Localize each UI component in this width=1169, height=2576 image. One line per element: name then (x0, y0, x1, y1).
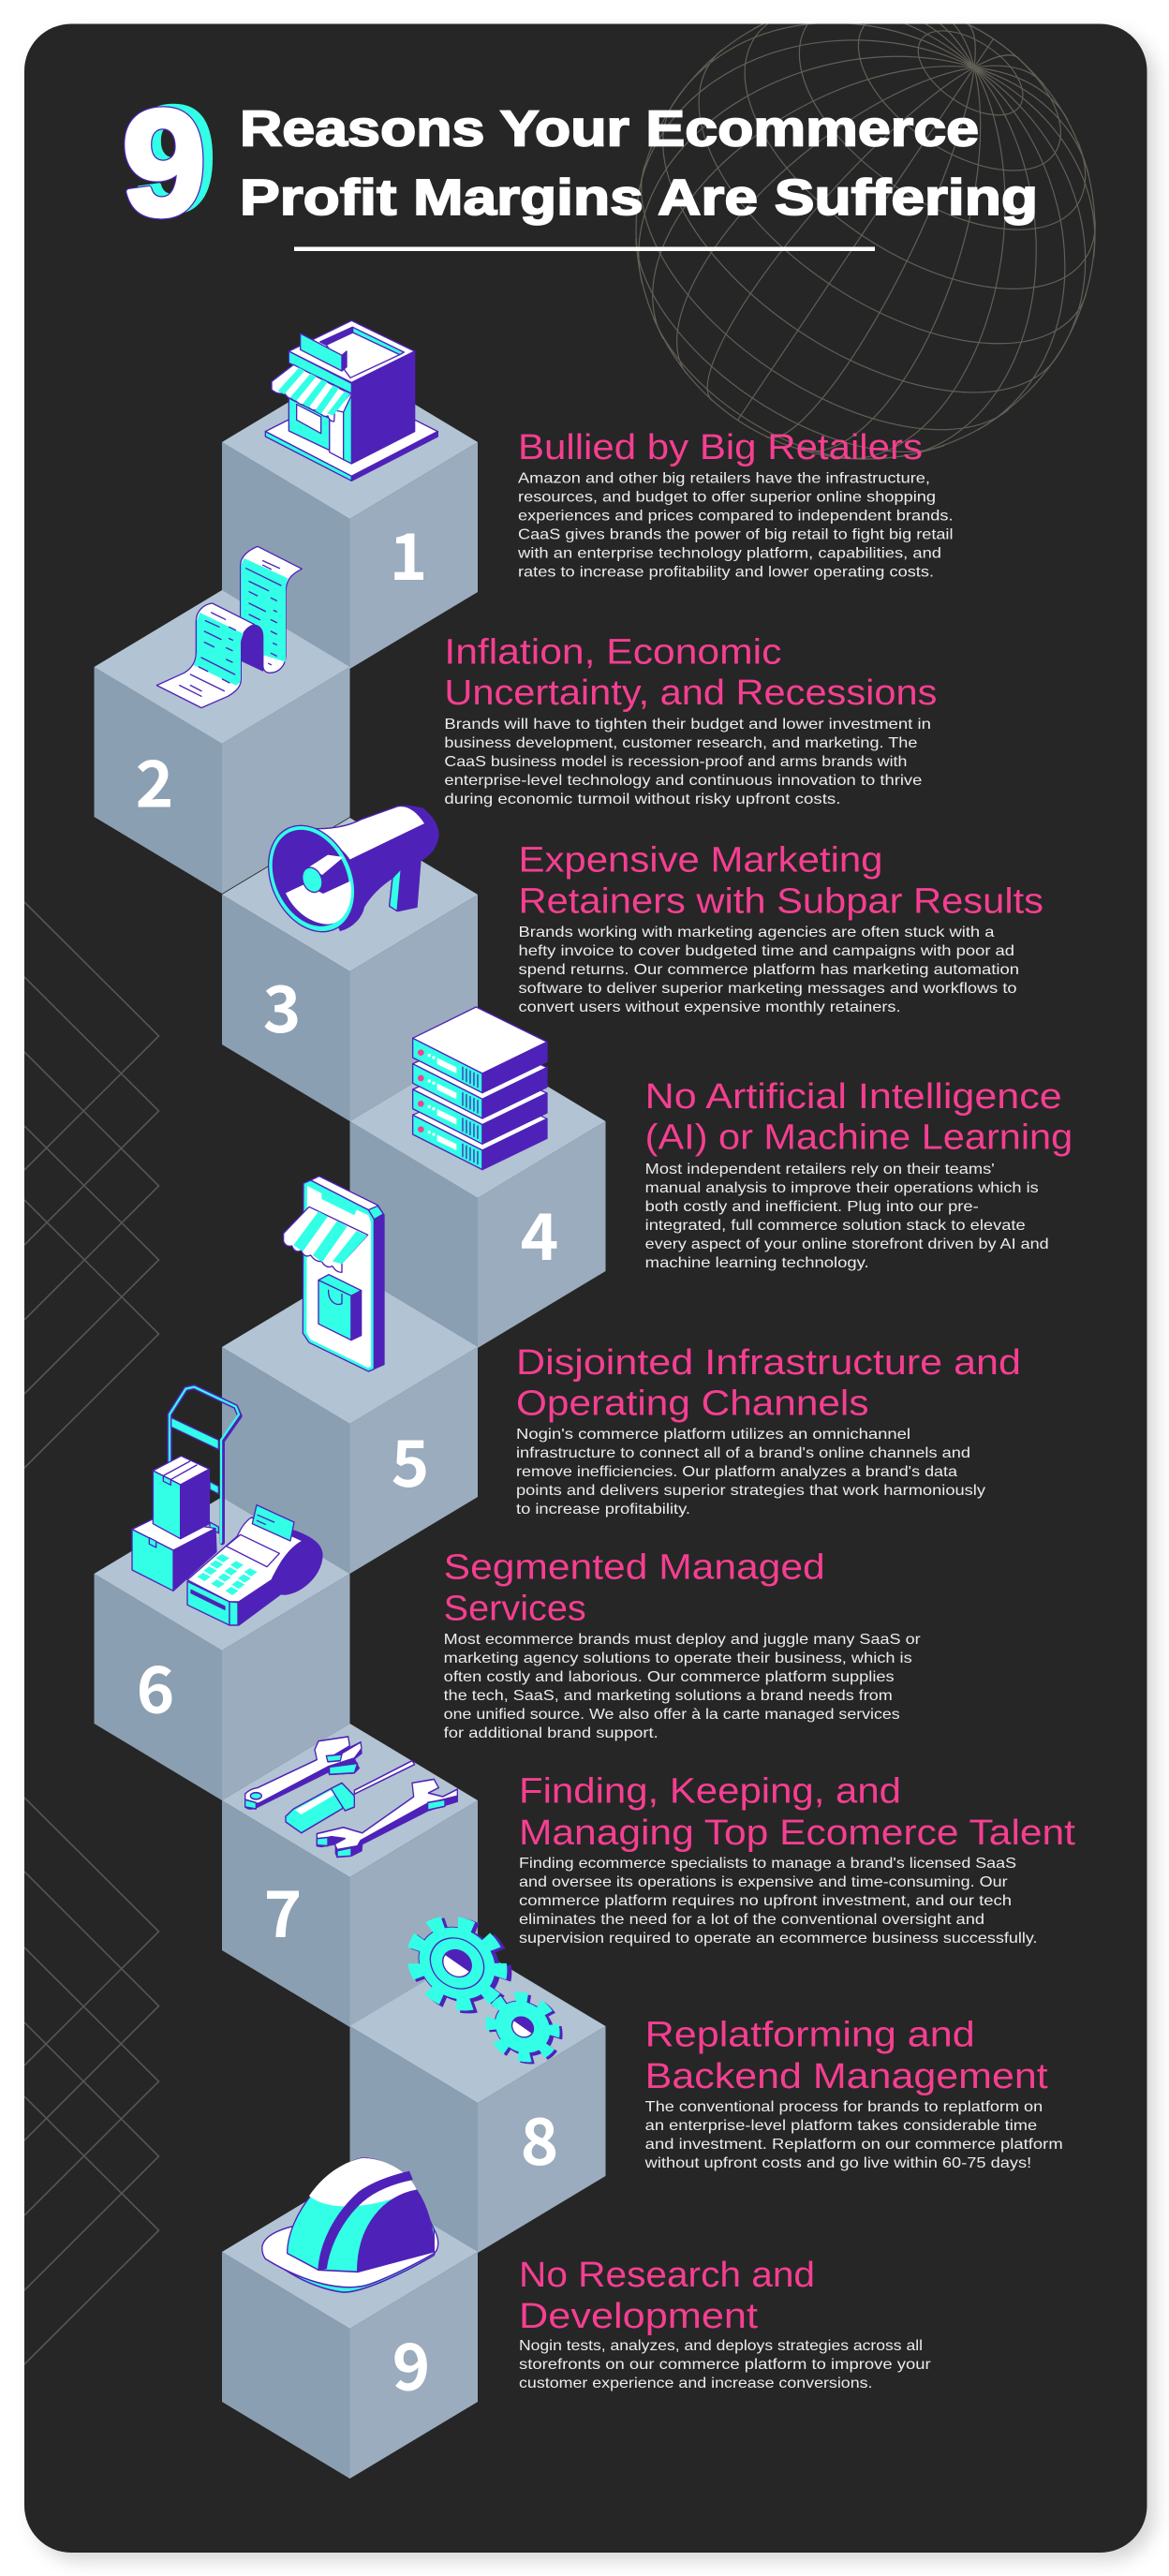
body 8: The conventional process for brands to replatform on (645, 2099, 1043, 2115)
heading 2: Inflation, Economic (444, 633, 781, 673)
body 3: convert users without expensive monthly retainers. (519, 999, 901, 1015)
body 4: Most independent retailers rely on their teams' (645, 1162, 995, 1177)
icon: dolly, boxes and card terminal (132, 1387, 322, 1625)
step 7: finding talent (222, 1724, 1075, 2027)
body 1: resources, and budget to offer superior online shopping (518, 489, 936, 506)
body 4: machine learning technology. (645, 1255, 869, 1271)
heading 9 (519, 2256, 815, 2336)
icon: storefront (265, 320, 437, 481)
step 9: no research and development (222, 2158, 931, 2479)
cube 4 (350, 1044, 605, 1348)
big numeral 9: 9 (133, 75, 215, 243)
number 3: 3 (263, 957, 301, 1051)
body 9: storefronts on our commerce platform to improve your (519, 2357, 931, 2373)
diamond line pattern: lower left (24, 1798, 159, 2364)
number 8: 8 (521, 2090, 558, 2184)
body 8: without upfront costs and go live within 60-75 days! (644, 2155, 1031, 2171)
heading 8: Replatforming and (645, 2016, 975, 2055)
heading 3: Expensive Marketing (519, 841, 882, 881)
body 3: software to deliver superior marketing messages and workflows to (519, 981, 1017, 997)
body 3: spend returns. Our commerce platform has marketing automation (519, 962, 1019, 978)
body 1: experiences and prices compared to independent brands. (518, 508, 954, 525)
heading 2 (444, 633, 937, 713)
body 1: rates to increase profitability and lower operating costs. (518, 564, 934, 581)
body 4 (645, 1162, 1049, 1271)
icon: hard hat (262, 2158, 438, 2292)
body 7: commerce platform requires no upfront investment, and our tech (519, 1893, 1012, 1909)
body 5: Nogin's commerce platform utilizes an omnichannel (516, 1427, 910, 1443)
number 2: 2 (136, 733, 173, 826)
body 6: the tech, SaaS, and marketing solutions a brand needs from (444, 1688, 893, 1704)
icon: megaphone (252, 806, 438, 946)
body 9 (519, 2338, 931, 2391)
cube 1 (222, 365, 478, 669)
step 2: inflation (94, 546, 937, 894)
step 3: marketing retainers (222, 806, 1043, 1121)
body 1: Amazon and other big retailers have the infrastructure, (518, 470, 930, 487)
step 5: disjointed infrastructure (222, 1177, 1021, 1574)
heading 3: Retainers with Subpar Results (519, 882, 1043, 922)
step 4: no AI (350, 1007, 1073, 1348)
body 7: supervision required to operate an ecommerce business successfully. (519, 1931, 1038, 1947)
title line 1: Reasons Your Ecommerce (240, 101, 979, 157)
heading 6 (444, 1548, 825, 1629)
body 4: integrated, full commerce solution stack to elevate (645, 1218, 1026, 1234)
body 3 (519, 925, 1019, 1015)
body 7: Finding ecommerce specialists to manage a brand's licensed SaaS (519, 1856, 1016, 1872)
body 5: remove inefficiencies. Our platform analyzes a brand's data (516, 1464, 957, 1480)
body 6: marketing agency solutions to operate their business, which is (444, 1651, 912, 1666)
body 4: manual analysis to improve their operations which is (645, 1180, 1039, 1196)
wireframe globe (636, 0, 1095, 459)
body 3: hefty invoice to cover budgeted time and campaigns with poor ad (519, 943, 1014, 959)
heading 6: Services (444, 1590, 586, 1629)
body 6: Most ecommerce brands must deploy and juggle many SaaS or (444, 1632, 921, 1648)
body 1: with an enterprise technology platform, capabilities, and (517, 545, 941, 562)
heading 1: Bullied by Big Retailers (518, 428, 923, 467)
body 7: eliminates the need for a lot of the conventional oversight and (519, 1912, 984, 1928)
body 4: every aspect of your online storefront driven by AI and (645, 1236, 1049, 1252)
step 6: segmented managed services (94, 1387, 921, 1800)
body 2: business development, customer research, and marketing. The (444, 735, 918, 751)
number 6: 6 (137, 1637, 174, 1731)
body 3: Brands working with marketing agencies are often stuck with a (519, 925, 995, 940)
icon: gears (400, 1907, 569, 2070)
body 5: to increase profitability. (516, 1502, 690, 1517)
step 8: replatforming (350, 1907, 1063, 2253)
body 6: one unified source. We also offer à la carte managed services (444, 1707, 900, 1723)
body 2: Brands will have to tighten their budget and lower investment in (444, 717, 931, 733)
heading 7: Finding, Keeping, and (519, 1772, 901, 1812)
step 1: bullied by big retailers (222, 320, 954, 669)
body 4: both costly and inefficient. Plug into our pre- (645, 1199, 979, 1215)
body 8: an enterprise-level platform takes considerable time (645, 2118, 1037, 2134)
cube 9 (222, 2175, 478, 2479)
heading 5: Operating Channels (516, 1384, 869, 1424)
body 2 (444, 717, 931, 807)
cube 5 (222, 1270, 478, 1574)
cube 3 (222, 818, 478, 1121)
number 4: 4 (521, 1185, 558, 1279)
heading 4 (645, 1077, 1073, 1158)
body 6: for additional brand support. (444, 1725, 658, 1741)
heading 2: Uncertainty, and Recessions (444, 674, 937, 713)
title line 2: Profit Margins Are Suffering (240, 170, 1038, 226)
heading 8 (645, 2016, 1048, 2096)
number 5: 5 (392, 1412, 429, 1505)
cube 8 (350, 1949, 605, 2253)
heading 9: Development (519, 2297, 758, 2336)
body 6: often costly and laborious. Our commerce platform supplies (444, 1669, 895, 1685)
heading 5 (516, 1343, 1021, 1424)
title underline (294, 247, 875, 251)
icon: receipt (156, 546, 302, 708)
diamond line pattern: upper left (24, 902, 159, 1468)
body 1: CaaS gives brands the power of big retail to fight big retail (518, 526, 954, 543)
big numeral 9: 9 (123, 79, 205, 246)
body 7: and oversee its operations is expensive and time-consuming. Our (519, 1874, 1008, 1890)
number 1: 1 (390, 505, 427, 599)
body 6 (444, 1632, 921, 1741)
icon: mobile shop (284, 1177, 384, 1371)
body 7 (519, 1856, 1038, 1947)
heading 8: Backend Management (645, 2057, 1048, 2096)
body 9: customer experience and increase conversions. (519, 2376, 873, 2391)
body 5: infrastructure to connect all of a brand's online channels and (516, 1445, 970, 1461)
body 1 (517, 470, 954, 581)
title block (123, 75, 1038, 251)
heading 5: Disjointed Infrastructure and (516, 1343, 1021, 1383)
heading 6: Segmented Managed (444, 1548, 825, 1588)
heading 4: (AI) or Machine Learning (645, 1118, 1073, 1158)
heading 3 (519, 841, 1043, 922)
body 2: CaaS business model is recession-proof and arms brands with (444, 754, 907, 770)
heading 7 (519, 1772, 1075, 1853)
heading 9: No Research and (519, 2256, 815, 2295)
heading 7: Managing Top Ecomerce Talent (519, 1814, 1075, 1853)
icon: wrenches and screwdriver (245, 1737, 457, 1857)
body 8 (644, 2099, 1063, 2171)
body 5 (516, 1427, 985, 1517)
heading 4: No Artificial Intelligence (645, 1077, 1062, 1117)
icon: server rack (413, 1007, 547, 1170)
cube 2 (94, 590, 350, 894)
cube 7 (222, 1724, 478, 2027)
body 8: and investment. Replatform on our commerce platform (645, 2137, 1063, 2153)
cube 6 (94, 1497, 350, 1800)
big numeral 9: 9 (123, 79, 205, 246)
body 2: enterprise-level technology and continuous innovation to thrive (444, 773, 923, 789)
number 9: 9 (392, 2316, 430, 2409)
body 5: points and delivers superior strategies that work harmoniously (516, 1483, 985, 1499)
body 9: Nogin tests, analyzes, and deploys strategies across all (519, 2338, 923, 2354)
body 2: during economic turmoil without risky upfront costs. (444, 792, 840, 807)
number 7: 7 (264, 1862, 302, 1956)
